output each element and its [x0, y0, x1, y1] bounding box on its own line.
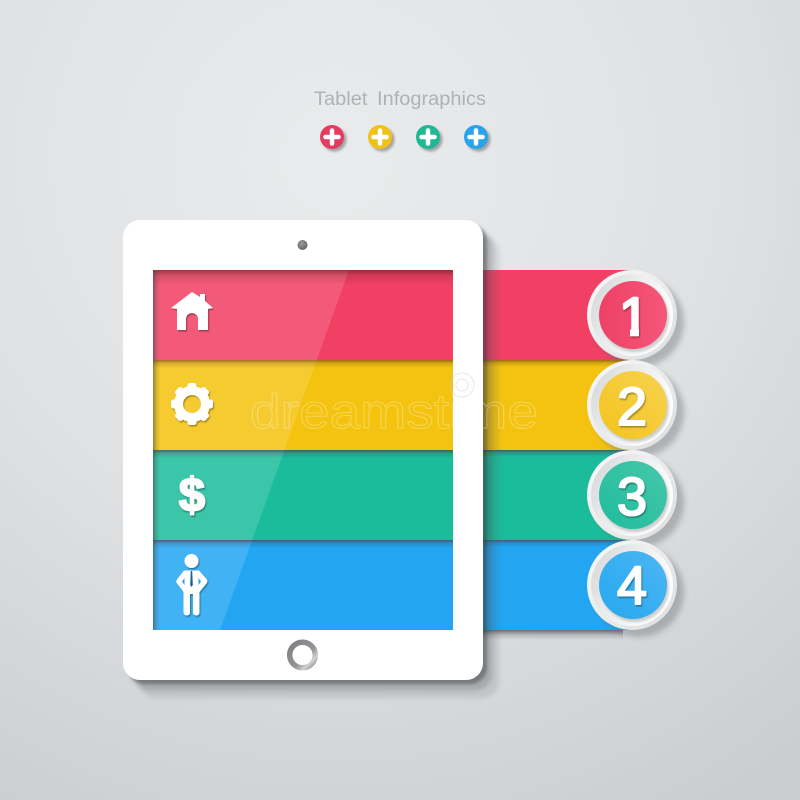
badge 2: 2 [617, 377, 647, 437]
icon: businessman [176, 554, 207, 616]
icon: gear [171, 383, 213, 425]
watermark [250, 373, 538, 439]
band 4 blue [470, 540, 632, 630]
badge 3: 3 [617, 467, 647, 527]
title: Tablet Infographics [314, 88, 486, 110]
coloured bands extending from the tablet [470, 270, 633, 640]
number badges [587, 270, 684, 637]
tablet [123, 220, 483, 680]
plus button: red [320, 125, 346, 152]
screen band red [153, 270, 453, 360]
plus button: green [416, 125, 442, 152]
camera [298, 240, 308, 250]
plus buttons row [320, 125, 490, 152]
watermark: dreamstime [250, 386, 538, 439]
badge 1: 1 [619, 287, 649, 347]
tablet shadow [127, 224, 499, 698]
badge 4: 4 [617, 556, 647, 616]
home button [290, 642, 315, 668]
icon: house [171, 292, 213, 330]
screen band green [153, 450, 453, 540]
band 2 yellow [470, 360, 632, 450]
screen gloss [153, 270, 349, 630]
tablet body [123, 220, 483, 680]
tablet screen [153, 270, 453, 630]
plus button: blue [464, 125, 490, 152]
badge 3 [587, 450, 684, 547]
badge 4 [587, 540, 684, 637]
screen band blue [153, 540, 453, 630]
band 1 red [470, 270, 632, 360]
plus button: yellow [368, 125, 394, 152]
icon: dollar: $ [179, 468, 205, 521]
badge 2 [587, 360, 684, 457]
badge 1 [587, 270, 684, 367]
screen band yellow [153, 360, 453, 450]
band 3 green [470, 450, 632, 540]
